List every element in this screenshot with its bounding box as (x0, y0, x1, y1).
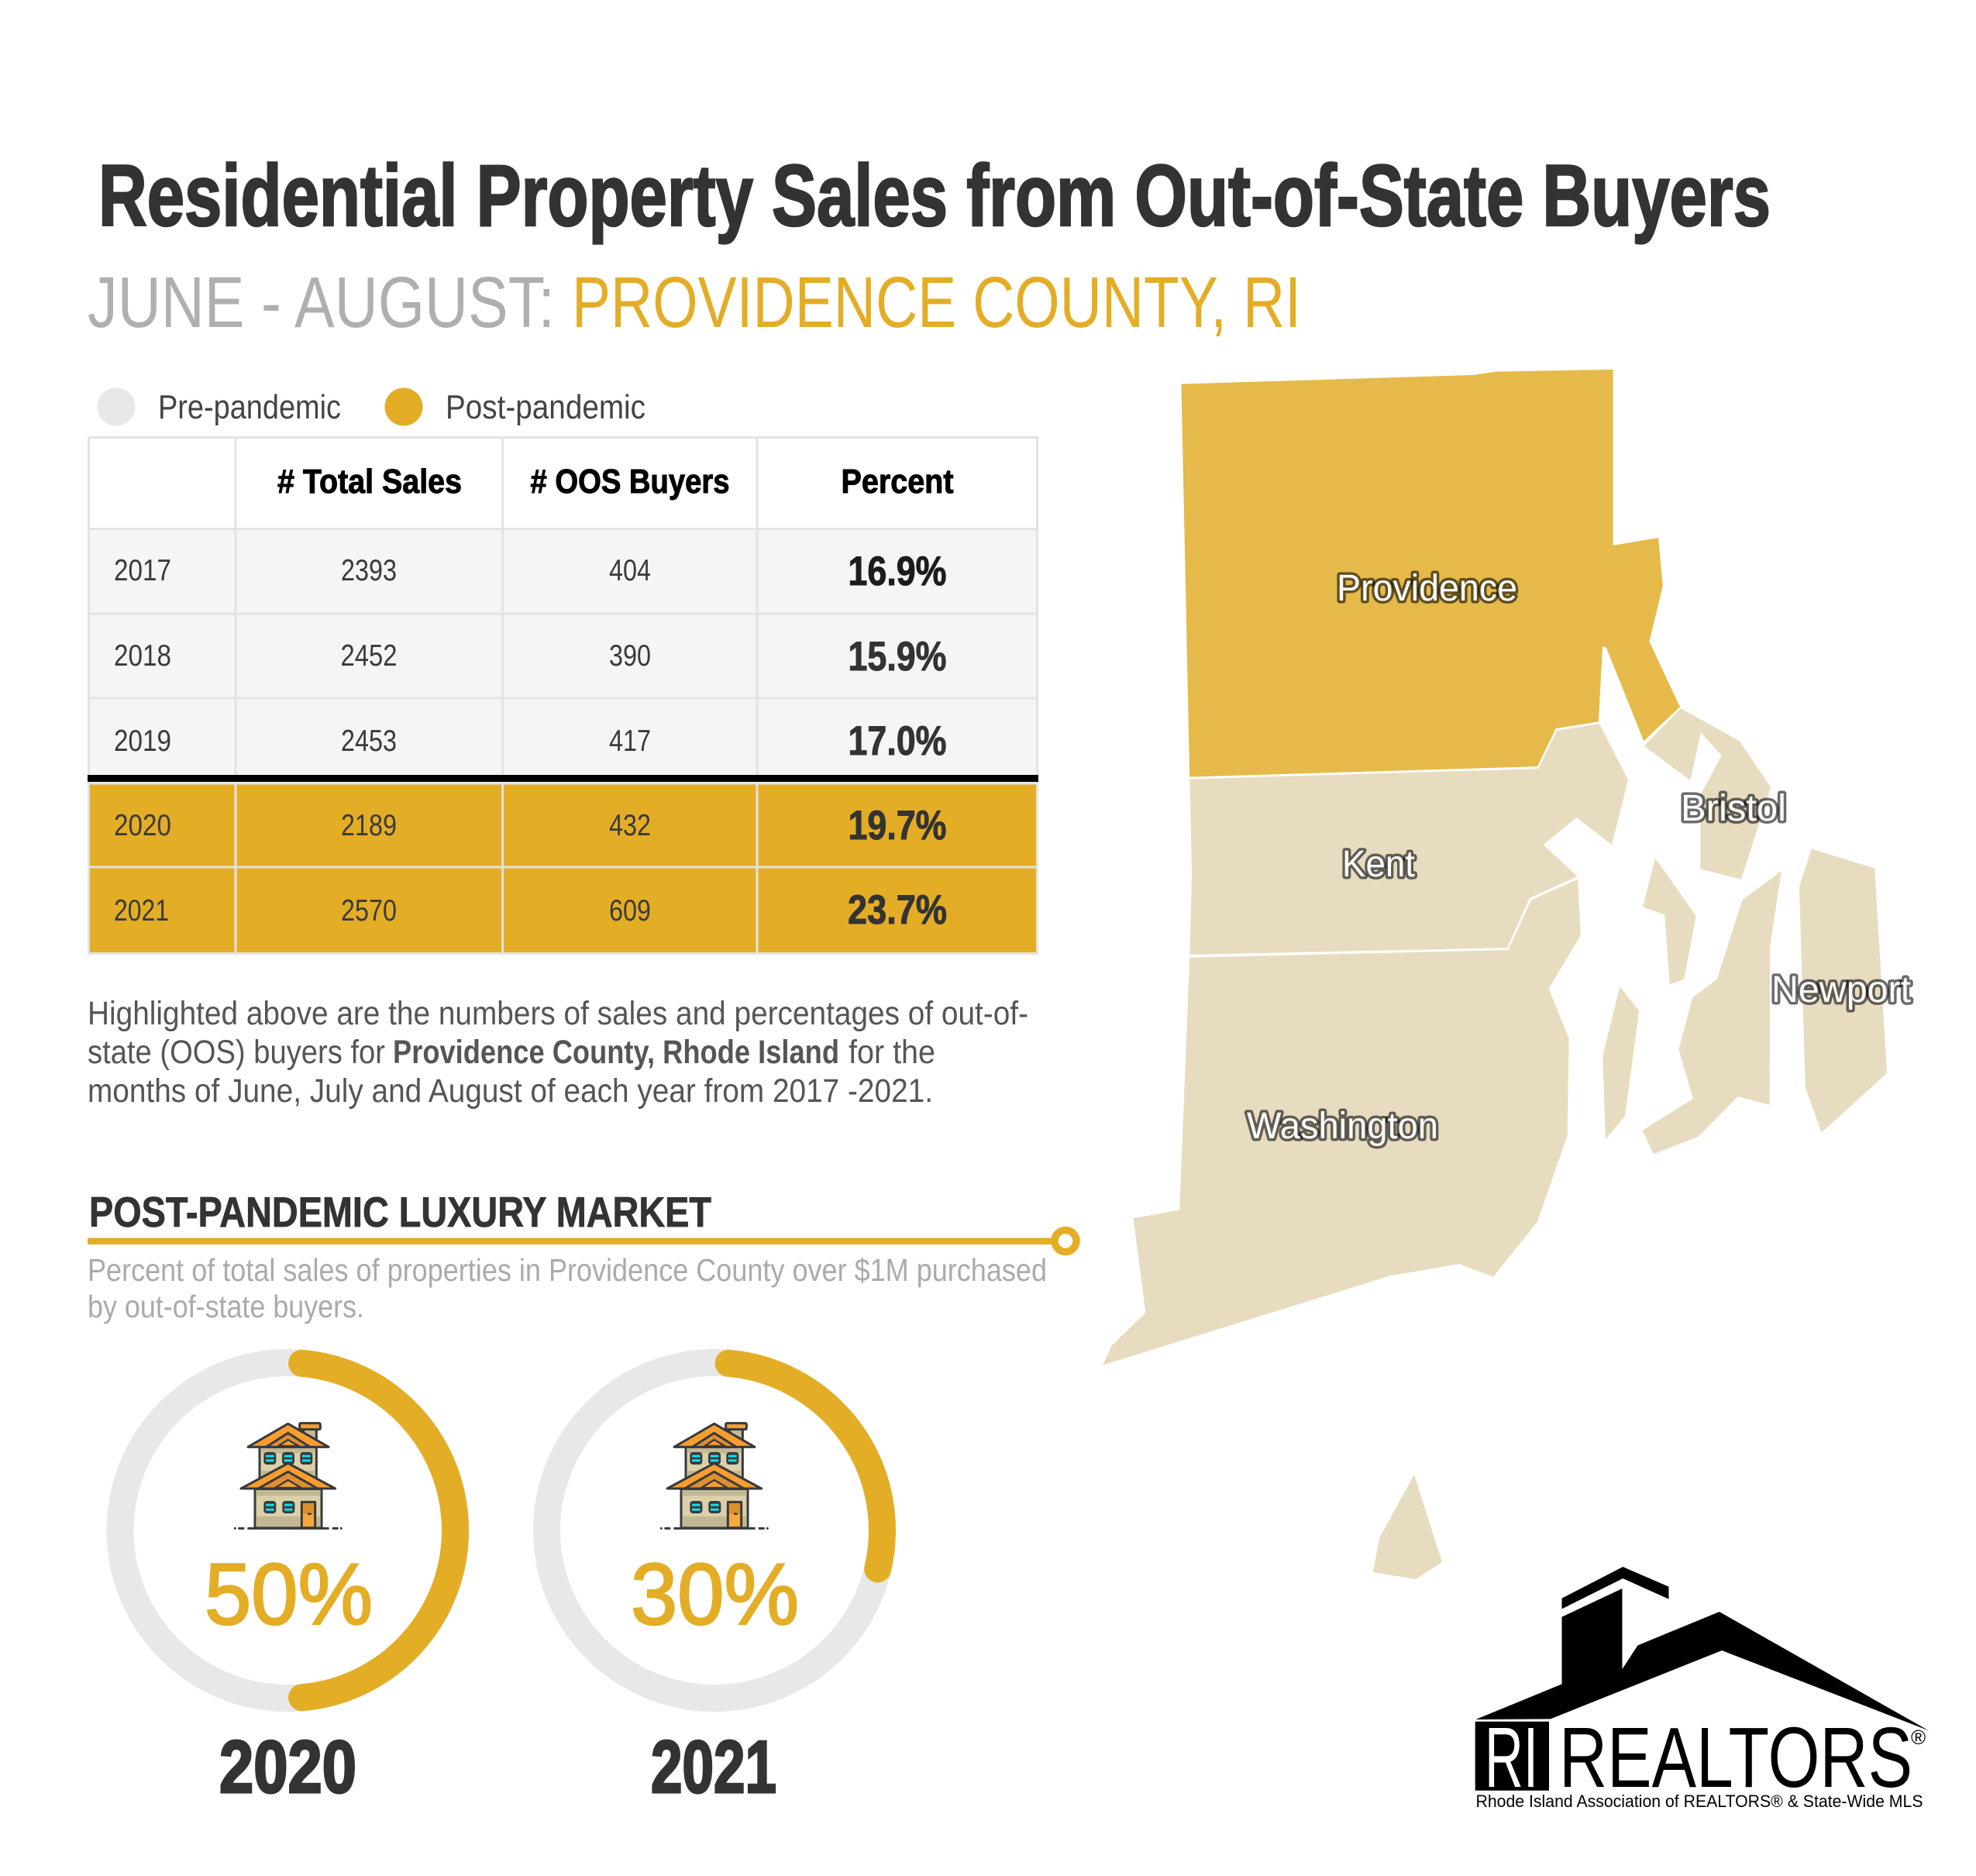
table row 2018: 2452 (341, 639, 397, 673)
text block: table description: Providence County, Rhode Island (393, 1034, 839, 1071)
logo: registered mark: ® (1911, 1726, 1926, 1749)
icon: house 2020 (234, 1423, 343, 1530)
table row 2019 (114, 718, 947, 764)
table row 2017: 16.9% (848, 549, 947, 594)
table row 2020 (114, 803, 947, 849)
text block: table description: Highlighted above are the numbers of sales and percentages of out-of- (88, 995, 1028, 1032)
map label: Providence: Providence (1337, 568, 1517, 609)
text block: table description (88, 995, 1028, 1110)
text block: table description: months of June, July and August of each year from 2017 -2021. (88, 1072, 933, 1110)
table row 2021: 2021 (114, 894, 169, 928)
table row 2020: 2020 (114, 809, 171, 842)
logo: RI box: RI (1485, 1710, 1538, 1805)
table row 2021 (114, 887, 947, 933)
donut chart: 2021 (547, 1362, 882, 1699)
heading: post-pandemic luxury market: POST-PANDEMIC LUXURY MARKET (89, 1188, 711, 1236)
table row 2018 (114, 634, 947, 680)
table row 2021: 2570 (341, 894, 397, 928)
map label: Washington: Washington (1247, 1106, 1438, 1147)
map label: Newport: Newport (1771, 969, 1911, 1010)
table header row: # Total Sales (277, 463, 462, 501)
panel: data table (88, 437, 1038, 953)
table row 2020: 2189 (341, 809, 397, 842)
text block: luxury market description: Percent of total sales of properties in Providence County over $1M purchased (88, 1252, 1047, 1288)
map label: Kent: Kent (1342, 844, 1415, 885)
county: Bristol (1644, 708, 1771, 879)
table row 2018: 390 (609, 639, 651, 673)
table row 2018: 2018 (114, 639, 171, 673)
value: 30%: 30% (631, 1546, 799, 1643)
table row 2020: 432 (609, 809, 651, 842)
text block: luxury market description (88, 1252, 1047, 1324)
table header row (277, 463, 954, 501)
legend: Pre-pandemic (158, 388, 341, 426)
heading rule with end dot (88, 1231, 1076, 1252)
text block: luxury market description: by out-of-state buyers. (88, 1289, 364, 1324)
table row 2017 (114, 549, 947, 594)
donut chart: 2020 (120, 1362, 456, 1699)
county: Newport islands (1602, 849, 1887, 1154)
logo: tagline: Rhode Island Association of REALTORS® & State-Wide MLS (1475, 1792, 1923, 1811)
table row 2019: 417 (609, 725, 651, 758)
table row 2019: 2453 (341, 725, 397, 758)
table header row: # OOS Buyers (530, 463, 730, 501)
map: Rhode Island counties (1101, 369, 1911, 1579)
legend (98, 387, 645, 426)
icon: house 2021 (660, 1423, 769, 1530)
county: Block Island (1373, 1475, 1442, 1579)
text block: table description: state (OOS) buyers for (88, 1034, 385, 1071)
table row 2017: 2393 (341, 554, 397, 587)
subtitle: PROVIDENCE COUNTY, RI (572, 262, 1301, 342)
table row 2019: 2019 (114, 725, 171, 758)
text block: table description: for the (849, 1034, 935, 1071)
table row 2017: 2017 (114, 554, 171, 587)
table row 2020: 19.7% (848, 803, 947, 849)
legend: Post-pandemic (446, 388, 645, 426)
logo: chimney cap (1562, 1567, 1668, 1609)
logo: RI Realtors (1475, 1567, 1929, 1811)
logo: RI box (1475, 1710, 1549, 1805)
map label: Bristol: Bristol (1681, 788, 1786, 829)
table row 2018: 15.9% (848, 634, 947, 680)
value: 50%: 50% (205, 1546, 373, 1643)
table row 2021: 609 (609, 894, 651, 928)
county: Kent (1189, 723, 1629, 955)
county: Providence (1180, 369, 1681, 778)
year label: 2021: 2021 (651, 1726, 776, 1809)
year label: 2020: 2020 (219, 1726, 356, 1809)
county: Washington (1101, 878, 1582, 1366)
table row 2017: 404 (609, 554, 651, 587)
table header row: Percent (842, 463, 954, 501)
subtitle (88, 262, 1301, 342)
logo: roof (1475, 1589, 1929, 1730)
table row 2019: 17.0% (848, 718, 947, 764)
table row 2021: 23.7% (848, 887, 947, 933)
subtitle: JUNE - AUGUST: (88, 262, 555, 342)
